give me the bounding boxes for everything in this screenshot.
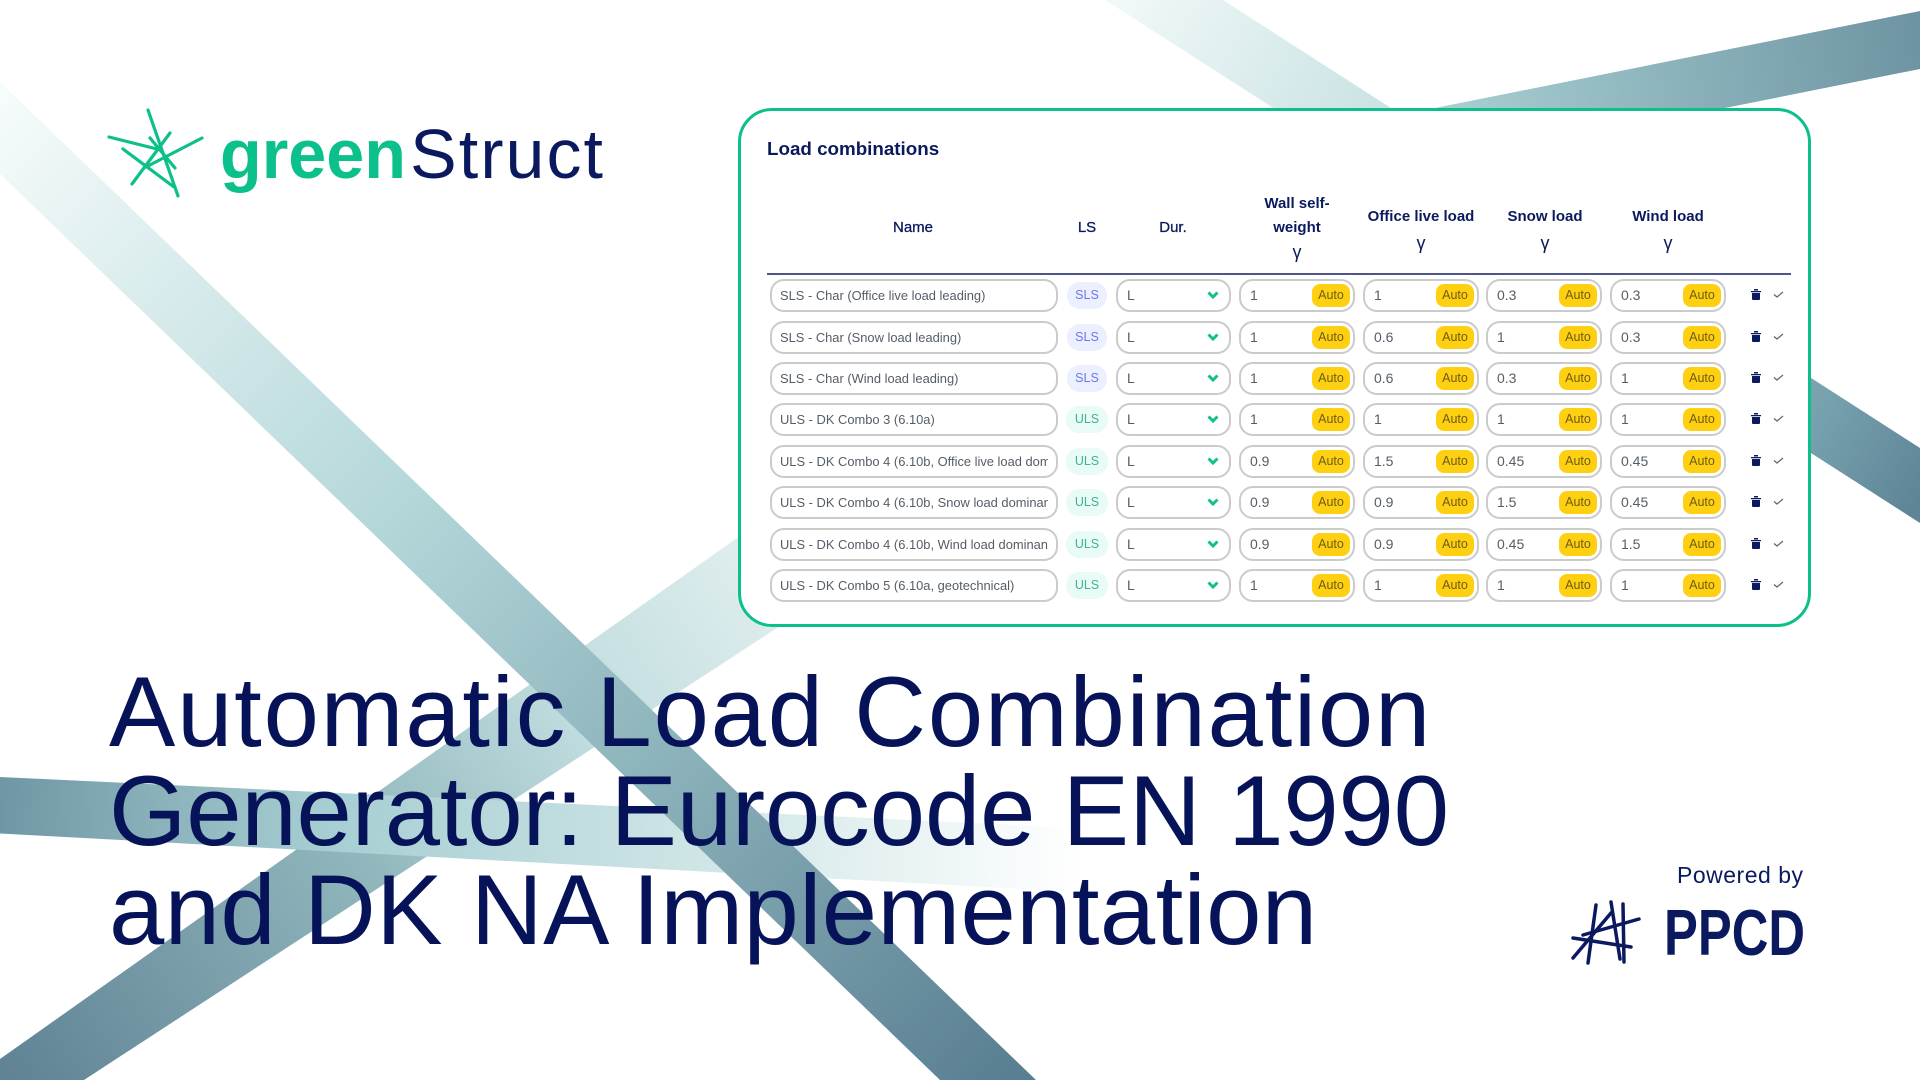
- row 7: 1.5: [1621, 536, 1640, 552]
- row 4: ULS - DK Combo 3 (6.10a): [780, 412, 935, 427]
- row 6: 0.9: [1250, 494, 1269, 510]
- row 5: L: [1127, 453, 1135, 469]
- column header: Wall self-weight: [1264, 195, 1330, 262]
- row 5: Auto: [1689, 454, 1715, 468]
- row 4: Auto: [1689, 412, 1715, 426]
- column header: Snow load: Snow load: [1508, 208, 1582, 225]
- row 8: ULS: [1075, 578, 1099, 592]
- row 3: [770, 362, 1784, 395]
- row 5: Auto: [1565, 454, 1591, 468]
- row 1: Auto: [1689, 288, 1715, 302]
- row 8: 1: [1621, 577, 1629, 593]
- row 3: 0.3: [1497, 370, 1516, 386]
- row 6: Auto: [1318, 495, 1344, 509]
- row 3: 1: [1621, 370, 1629, 386]
- row 2: Auto: [1565, 330, 1591, 344]
- column header: Office live load: Office live load: [1368, 208, 1474, 225]
- row 5: 0.45: [1621, 453, 1648, 469]
- row 7: Auto: [1689, 536, 1715, 550]
- row 1: 0.3: [1497, 286, 1516, 302]
- row 4: Auto: [1442, 412, 1468, 426]
- row 3: 1: [1250, 370, 1258, 386]
- row 1: Auto: [1442, 288, 1468, 302]
- row 4: 1: [1621, 411, 1629, 427]
- row 4: 1: [1497, 411, 1505, 427]
- row 7: L: [1127, 536, 1135, 552]
- row 5: 1.5: [1374, 453, 1393, 469]
- row 7: ULS - DK Combo 4 (6.10b, Wind load dominant): [780, 536, 1048, 552]
- row 7: 0.9: [1250, 536, 1269, 552]
- row 8: Auto: [1318, 578, 1344, 592]
- row 7: Auto: [1442, 536, 1468, 550]
- column header: Office live load: γ: [1416, 233, 1425, 253]
- row 2: SLS - Char (Snow load leading): [780, 330, 961, 344]
- panel: load combinations table: [738, 108, 1811, 627]
- wordmark: greenStruct: Struct: [410, 115, 603, 193]
- row 2: 0.6: [1374, 328, 1393, 344]
- row 8: L: [1127, 577, 1135, 593]
- row 5: [770, 445, 1784, 478]
- row 3: SLS: [1075, 371, 1099, 385]
- row 7: ULS: [1075, 536, 1099, 550]
- row 7: 0.45: [1497, 536, 1524, 552]
- row 5: Auto: [1442, 454, 1468, 468]
- row 4: ULS: [1075, 412, 1099, 426]
- row 1: 1: [1250, 286, 1258, 302]
- column header: Wall self-weight: Wall self-: [1264, 195, 1330, 212]
- row 6: 1.5: [1497, 494, 1516, 510]
- row 3: Auto: [1689, 371, 1715, 385]
- row 6: [770, 486, 1784, 519]
- row 2: 1: [1250, 328, 1258, 344]
- row 3: Auto: [1318, 371, 1344, 385]
- row 8: 1: [1374, 577, 1382, 593]
- title: [109, 657, 1449, 966]
- row 8: ULS - DK Combo 5 (6.10a, geotechnical): [780, 578, 1014, 593]
- row 3: Auto: [1442, 371, 1468, 385]
- row 2: Auto: [1318, 330, 1344, 344]
- row 3: Auto: [1565, 371, 1591, 385]
- row 8: [770, 569, 1784, 602]
- row 1: 1: [1374, 286, 1382, 302]
- wordmark: greenStruct: green: [220, 115, 406, 193]
- row 6: 0.9: [1374, 494, 1393, 510]
- row 1: SLS - Char (Office live load leading): [780, 288, 985, 302]
- row 2: Auto: [1689, 330, 1715, 344]
- column header: Wall self-weight: weight: [1273, 219, 1321, 236]
- column header: Wind load: γ: [1664, 233, 1672, 253]
- row 8: Auto: [1689, 578, 1715, 592]
- column header: Dur.: Dur.: [1159, 219, 1187, 236]
- column header: Office live load: [1368, 208, 1474, 253]
- row 1: L: [1127, 286, 1135, 302]
- row 2: 0.3: [1621, 328, 1640, 344]
- row 2: 1: [1497, 328, 1505, 344]
- row 1: SLS: [1075, 288, 1099, 302]
- row 4: 1: [1250, 411, 1258, 427]
- row 1: [770, 279, 1784, 312]
- row 4: Auto: [1565, 412, 1591, 426]
- column header: LS: LS: [1078, 219, 1096, 236]
- column header: Snow load: [1508, 208, 1582, 253]
- row 6: Auto: [1689, 495, 1715, 509]
- icon: greenStruct star mark: [109, 110, 202, 196]
- row 7: 0.9: [1374, 536, 1393, 552]
- title: and DK NA Implementation: [109, 855, 1317, 966]
- row 2: [770, 321, 1784, 354]
- row 5: Auto: [1318, 454, 1344, 468]
- row 4: [770, 403, 1784, 436]
- row 3: 0.6: [1374, 370, 1393, 386]
- row 2: SLS: [1075, 330, 1099, 344]
- row 8: Auto: [1442, 578, 1468, 592]
- row 1: Auto: [1318, 288, 1344, 302]
- row 2: Auto: [1442, 330, 1468, 344]
- row 4: 1: [1374, 411, 1382, 427]
- row 6: Auto: [1565, 495, 1591, 509]
- row 3: SLS - Char (Wind load leading): [780, 371, 958, 386]
- row 7: Auto: [1318, 536, 1344, 550]
- column header: Wind load: Wind load: [1632, 208, 1704, 225]
- title: Generator: Eurocode EN 1990: [109, 756, 1449, 867]
- row 5: ULS: [1075, 454, 1099, 468]
- row 6: ULS: [1075, 495, 1099, 509]
- text: Powered by: Powered by: [1677, 862, 1804, 888]
- column header: Wind load: [1632, 208, 1704, 253]
- column header: Name: Name: [893, 219, 933, 236]
- row 7: [770, 528, 1784, 561]
- column header: Snow load: γ: [1540, 233, 1550, 253]
- row 8: 1: [1250, 577, 1258, 593]
- row 4: Auto: [1318, 412, 1344, 426]
- row 3: L: [1127, 370, 1135, 386]
- row 8: Auto: [1565, 578, 1591, 592]
- row 6: 0.45: [1621, 494, 1648, 510]
- row 6: Auto: [1442, 495, 1468, 509]
- row 8: 1: [1497, 577, 1505, 593]
- icon: PPCD mark: [1573, 902, 1639, 963]
- wordmark: PPCD: PPCD: [1664, 896, 1805, 969]
- title: Automatic Load Combination: [109, 657, 1432, 768]
- row 4: L: [1127, 411, 1135, 427]
- row 7: Auto: [1565, 536, 1591, 550]
- row 5: 0.9: [1250, 453, 1269, 469]
- row 5: 0.45: [1497, 453, 1524, 469]
- row 2: L: [1127, 328, 1135, 344]
- row 6: L: [1127, 494, 1135, 510]
- row 1: 0.3: [1621, 286, 1640, 302]
- column header: Wall self-weight: γ: [1292, 242, 1301, 262]
- panel heading: Load combinations: [767, 138, 939, 159]
- row 1: Auto: [1565, 288, 1591, 302]
